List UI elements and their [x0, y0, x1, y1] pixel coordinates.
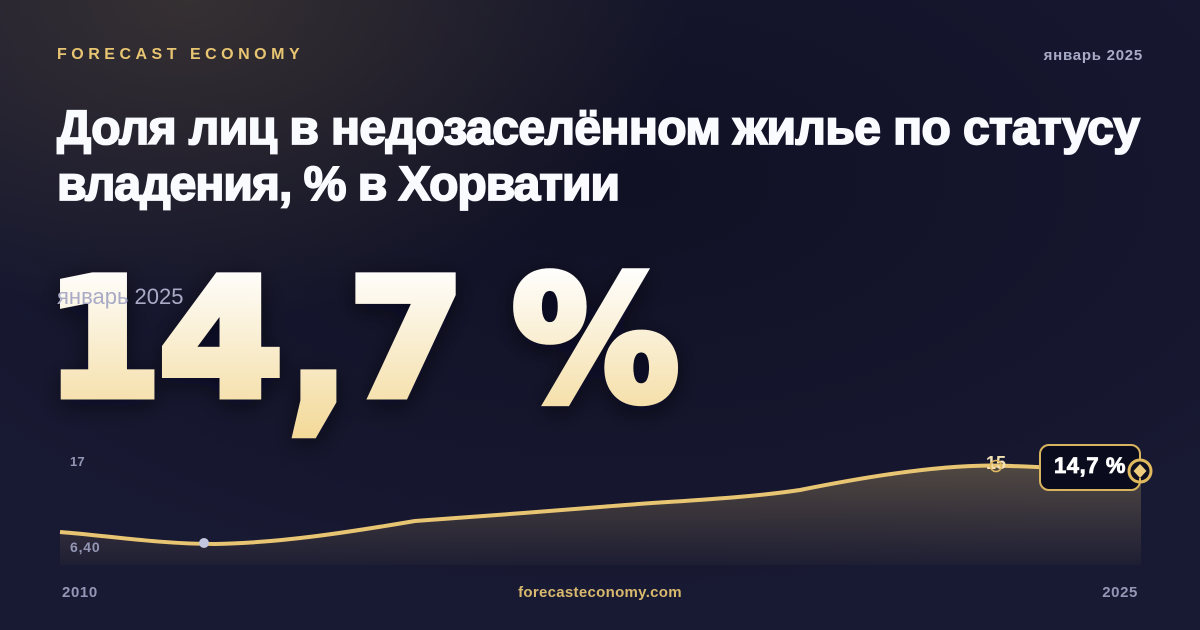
big value: %	[512, 241, 679, 440]
x axis end year: 2025	[1102, 584, 1138, 601]
chart line	[60, 466, 1141, 544]
end point marker	[1129, 460, 1151, 483]
date over big value: январь 2025	[57, 284, 184, 309]
source url: forecasteconomy.com	[518, 584, 682, 601]
min point marker	[199, 538, 209, 548]
date top right: январь 2025	[1044, 47, 1143, 64]
max point marker	[990, 460, 1002, 472]
y axis min label: 6,40	[70, 539, 100, 555]
big value	[46, 241, 679, 451]
y axis max label: 17	[70, 454, 85, 469]
big value: 7	[349, 245, 464, 434]
big value: ,	[289, 244, 348, 451]
brand label: FORECAST ECONOMY	[57, 46, 304, 63]
title: Доля лиц в недозаселённом жилье по статусу	[57, 102, 1140, 155]
big value: 4	[159, 246, 283, 434]
title	[57, 102, 1140, 211]
max point label: 15	[986, 453, 1006, 473]
value callout	[1040, 445, 1140, 490]
chart area fill	[60, 466, 1141, 565]
title: владения, % в Хорватии	[57, 158, 620, 211]
value callout: 14,7 %	[1054, 453, 1126, 478]
big value: 1	[46, 245, 161, 434]
x axis start year: 2010	[62, 584, 98, 601]
line chart	[60, 445, 1151, 565]
